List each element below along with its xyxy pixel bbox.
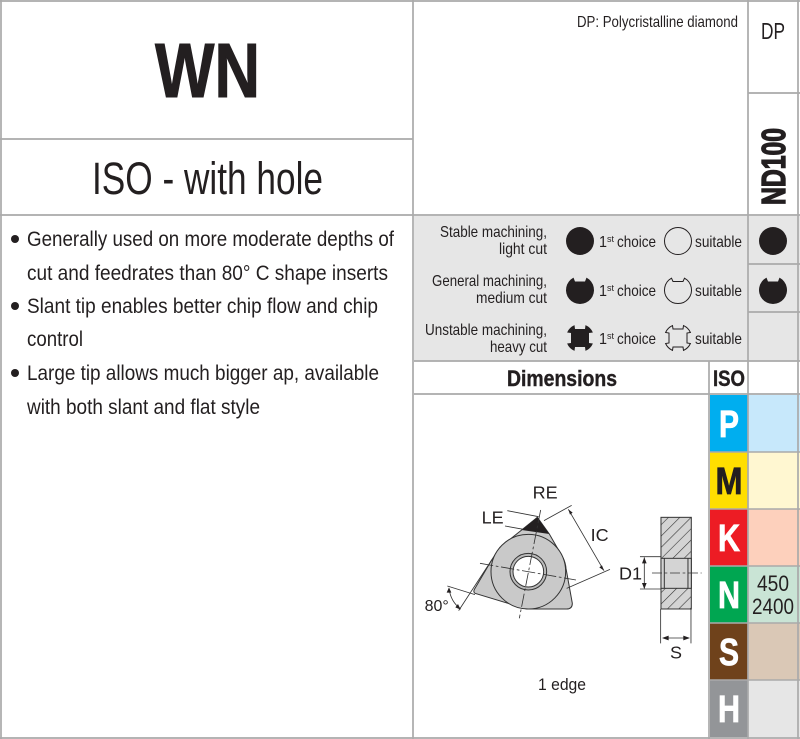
ISO letters: N <box>718 575 740 617</box>
ISO letters: K <box>718 518 740 560</box>
legend: stable machining: 1 <box>599 234 607 251</box>
ISO letters: S <box>719 632 739 674</box>
cutting speed values: 450 <box>757 571 789 596</box>
ISO letters: P <box>719 404 739 446</box>
diagram: insert top view <box>425 482 610 618</box>
legend: stable machining: st <box>607 234 614 244</box>
text block: feature bullets: control <box>27 328 83 351</box>
legend: unstable machining: st <box>607 331 614 341</box>
legend: general machining: st <box>607 283 614 293</box>
column heading: grade ND100: ND100 <box>755 128 792 205</box>
ISO letters: H <box>718 689 740 731</box>
cutting speed values: 2400 <box>752 594 794 619</box>
legend: general machining: 1 <box>599 283 607 300</box>
legend: stable machining: Stable machining, <box>440 224 547 241</box>
panel: ISO material colour column <box>710 395 800 737</box>
diagram: insert top view: IC <box>591 525 609 545</box>
legend: stable machining: light cut <box>499 241 547 258</box>
legend: general machining: medium cut <box>476 290 547 307</box>
subtitle: ISO - with hole <box>92 153 323 204</box>
cutting speed values <box>752 571 794 619</box>
title: WN <box>155 28 260 114</box>
legend: unstable machining: heavy cut <box>490 339 547 356</box>
text block: feature bullets: Slant tip enables better chip flow and chip <box>27 295 378 318</box>
heading: dimensions: Dimensions <box>507 366 617 391</box>
heading: ISO: ISO <box>713 366 745 391</box>
ISO letters <box>716 404 742 731</box>
legend: unstable machining: suitable <box>695 331 742 348</box>
diagram: insert side section view <box>619 517 702 663</box>
text block: feature bullets: with both slant and flat style <box>26 396 260 419</box>
panel: machining legend background <box>414 216 800 361</box>
note: grade legend: DP: Polycristalline diamond <box>577 14 738 31</box>
legend: general machining: choice <box>617 283 656 300</box>
column heading: DP: DP <box>761 18 785 44</box>
legend: unstable machining: 1 <box>599 331 607 348</box>
diagram: insert top view: 80° <box>425 598 449 615</box>
caption: 1 edge: 1 edge <box>538 675 586 694</box>
text block: feature bullets: Generally used on more moderate depths of <box>27 228 394 251</box>
text block: feature bullets: Large tip allows much bigger ap, available <box>27 362 379 385</box>
text block: feature bullets: cut and feedrates than 80° C shape inserts <box>27 262 388 285</box>
legend: general machining: General machining, <box>432 273 547 290</box>
legend: unstable machining: choice <box>617 331 656 348</box>
diagram: insert top view: LE <box>482 508 504 528</box>
legend: general machining <box>432 273 742 307</box>
legend: unstable machining: Unstable machining, <box>425 322 547 339</box>
legend: stable machining <box>440 224 742 258</box>
legend: general machining: suitable <box>695 283 742 300</box>
legend: stable machining: choice <box>617 234 656 251</box>
ISO letters: M <box>716 461 742 503</box>
diagram: insert top view: RE <box>533 482 558 502</box>
text block: feature bullets <box>11 228 394 419</box>
legend: stable machining: suitable <box>695 234 742 251</box>
legend: unstable machining <box>425 322 742 356</box>
diagram: insert side section view: D1 <box>619 563 642 583</box>
icon: general 1st choice rating <box>759 278 787 304</box>
diagram: insert side section view: S <box>670 643 682 663</box>
icon: stable 1st choice rating <box>759 227 787 255</box>
